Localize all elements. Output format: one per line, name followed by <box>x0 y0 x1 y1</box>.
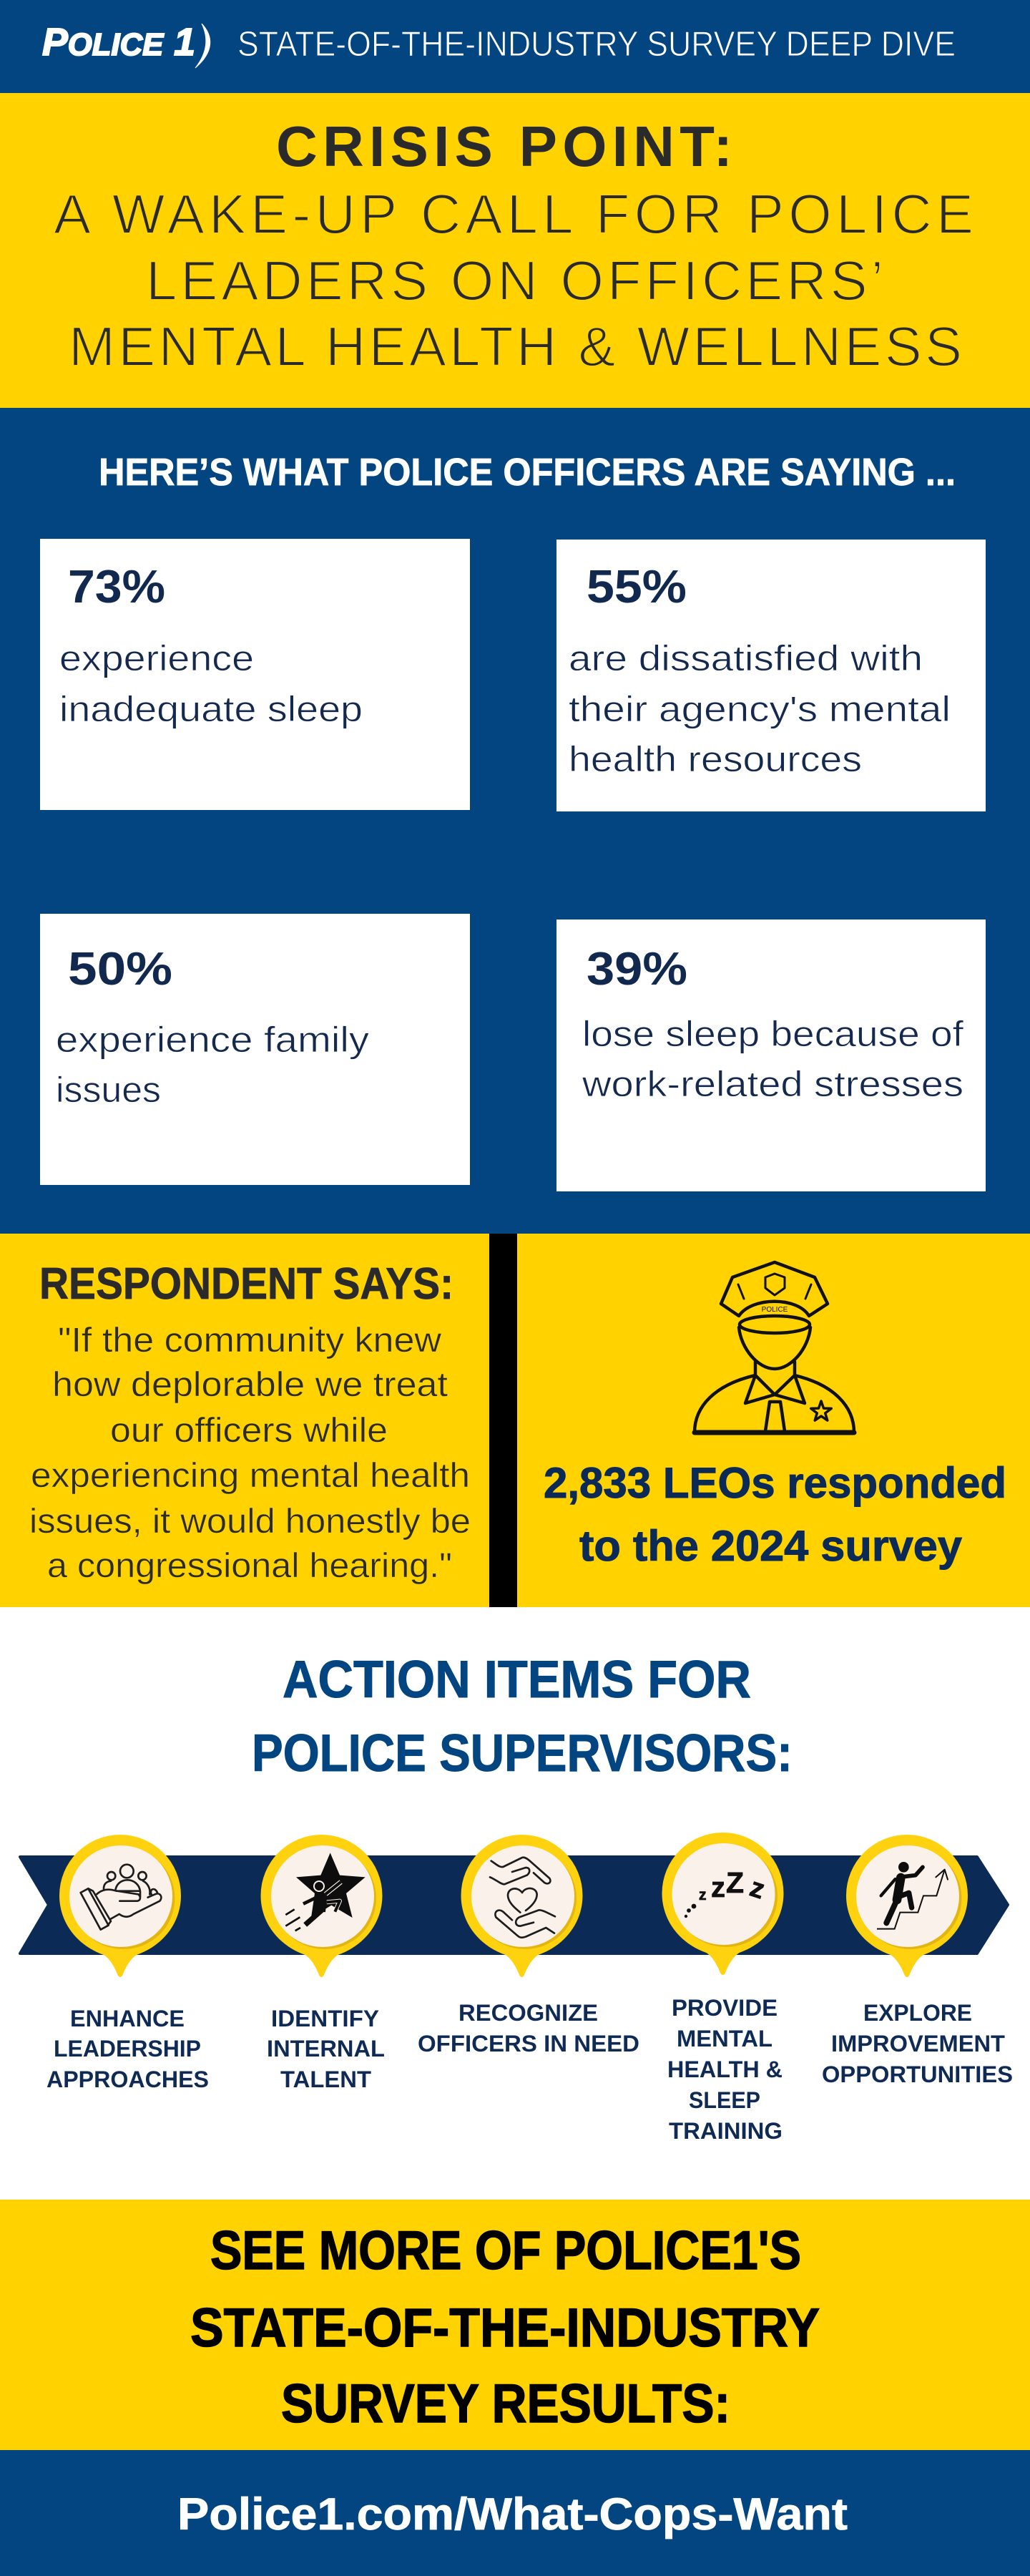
label: explore opportunities: EXPLORE <box>863 2000 972 2026</box>
stat card: 50%: issues <box>56 1070 161 1110</box>
icon: hands and heart <box>490 1858 555 1938</box>
label: recognize officers in need: RECOGNIZE <box>458 2000 598 2026</box>
icon: sleeping zzz <box>685 1866 768 1918</box>
survey count text: 2,833 LEOs responded <box>544 1459 1006 1507</box>
icon: sleeping zzz: z <box>746 1873 768 1905</box>
label: explore opportunities <box>822 2000 1013 2087</box>
survey count text <box>544 1459 1006 1570</box>
action item labels <box>46 1995 1013 2144</box>
stat card: 73% <box>40 539 470 810</box>
subtitle: MENTAL HEALTH & WELLNESS <box>69 315 962 378</box>
panel: title banner <box>0 93 1030 408</box>
stat card: 73%: experience <box>59 638 254 678</box>
icon: hand holding people <box>81 1865 161 1930</box>
call to action heading: SEE MORE OF POLICE1'S <box>210 2220 801 2281</box>
quote text: our officers while <box>110 1412 388 1450</box>
label: recognize officers in need <box>418 2000 639 2057</box>
pin: improvement <box>846 1835 968 1977</box>
subtitle <box>54 182 973 378</box>
label: provide training: PROVIDE <box>672 1995 778 2021</box>
url text: Police1.com/What-Cops-Want <box>177 2489 848 2540</box>
panel: see more banner <box>0 2200 1030 2450</box>
icon: sleeping zzz: Z <box>726 1866 744 1899</box>
heading: officers are saying: HERE’S WHAT POLICE OFFICERS ARE SAYING ... <box>99 451 956 494</box>
label: provide training: MENTAL <box>677 2026 772 2051</box>
label: recognize officers in need: OFFICERS IN NEED <box>418 2031 639 2057</box>
survey count text: to the 2024 survey <box>579 1522 963 1570</box>
stat card: 50% <box>40 914 470 1185</box>
subtitle: LEADERS ON OFFICERS’ <box>146 249 883 312</box>
heading: action items: ACTION ITEMS FOR <box>283 1651 751 1709</box>
label: provide training <box>667 1995 783 2144</box>
call to action heading: STATE-OF-THE-INDUSTRY <box>190 2298 820 2358</box>
quote text: "If the community knew <box>58 1322 441 1360</box>
label: identify internal talent: INTERNAL <box>267 2036 385 2062</box>
label: identify internal talent: TALENT <box>280 2067 371 2092</box>
stat card: 55%: are dissatisfied with <box>569 638 923 678</box>
stat card: 55% <box>556 540 986 811</box>
pin: enhance leadership <box>59 1835 181 1977</box>
label: enhance leadership approaches <box>46 2006 209 2092</box>
label: identify internal talent <box>267 2006 385 2092</box>
pin: sleep training <box>662 1833 784 1975</box>
label: explore opportunities: OPPORTUNITIES <box>822 2062 1013 2087</box>
label: identify internal talent: IDENTIFY <box>271 2006 379 2031</box>
icon: police officer <box>695 1262 854 1433</box>
subtitle: A WAKE-UP CALL FOR POLICE <box>54 182 973 245</box>
icon: sleeping zzz: z <box>699 1887 707 1903</box>
quote text: how deplorable we treat <box>52 1366 448 1404</box>
heading: action items: POLICE SUPERVISORS: <box>252 1724 793 1782</box>
panel: respondent quote and survey count <box>0 1234 1030 1607</box>
icon: climbing stairs <box>877 1862 948 1929</box>
stat card: 55%: 55% <box>587 560 687 613</box>
call to action heading <box>190 2220 820 2434</box>
icon: sleeping zzz: z <box>711 1872 725 1903</box>
label: provide training: HEALTH & <box>667 2057 783 2082</box>
header text: STATE-OF-THE-INDUSTRY SURVEY DEEP DIVE <box>237 25 956 64</box>
label: enhance leadership approaches: ENHANCE <box>70 2006 185 2031</box>
quote text <box>29 1322 471 1585</box>
heading: respondent says: RESPONDENT SAYS: <box>39 1259 453 1309</box>
quote text: a congressional hearing." <box>47 1547 452 1585</box>
title: crisis point: CRISIS POINT: <box>276 114 732 178</box>
panel: header bar <box>0 0 1030 93</box>
call to action heading: SURVEY RESULTS: <box>281 2373 730 2434</box>
stat card: 73%: inadequate sleep <box>59 689 363 729</box>
stat card: 39% <box>556 919 986 1191</box>
stat card: 55%: their agency's mental <box>569 689 951 729</box>
icon: star and runner <box>285 1853 366 1931</box>
stat card: 73%: 73% <box>68 560 165 613</box>
label: provide training: TRAINING <box>669 2118 783 2144</box>
stat card: 50%: 50% <box>68 942 172 995</box>
stat card: 39%: work-related stresses <box>582 1064 963 1104</box>
stat card: 39%: 39% <box>587 942 687 995</box>
quote text: experiencing mental health <box>31 1457 470 1495</box>
label: explore opportunities: IMPROVEMENT <box>831 2031 1005 2057</box>
stat card: 50%: experience family <box>56 1020 369 1060</box>
icon: police officer: POLICE <box>762 1306 788 1314</box>
panel: footer link <box>0 2450 1030 2576</box>
stat card: 39%: lose sleep because of <box>582 1014 963 1054</box>
ribbon arrow <box>20 1857 1008 1953</box>
heading: action items <box>252 1651 793 1782</box>
quote text: issues, it would honestly be <box>29 1503 471 1541</box>
panel: stats section <box>0 408 1030 1234</box>
pin: identify talent <box>260 1835 382 1977</box>
stat card: 55%: health resources <box>569 739 862 779</box>
logo: Police1: POLICE 1 <box>42 21 195 64</box>
label: enhance leadership approaches: APPROACHES <box>46 2067 209 2092</box>
label: provide training: SLEEP <box>689 2087 760 2113</box>
label: enhance leadership approaches: LEADERSHIP <box>54 2036 201 2062</box>
pin: recognize officers <box>461 1835 582 1977</box>
